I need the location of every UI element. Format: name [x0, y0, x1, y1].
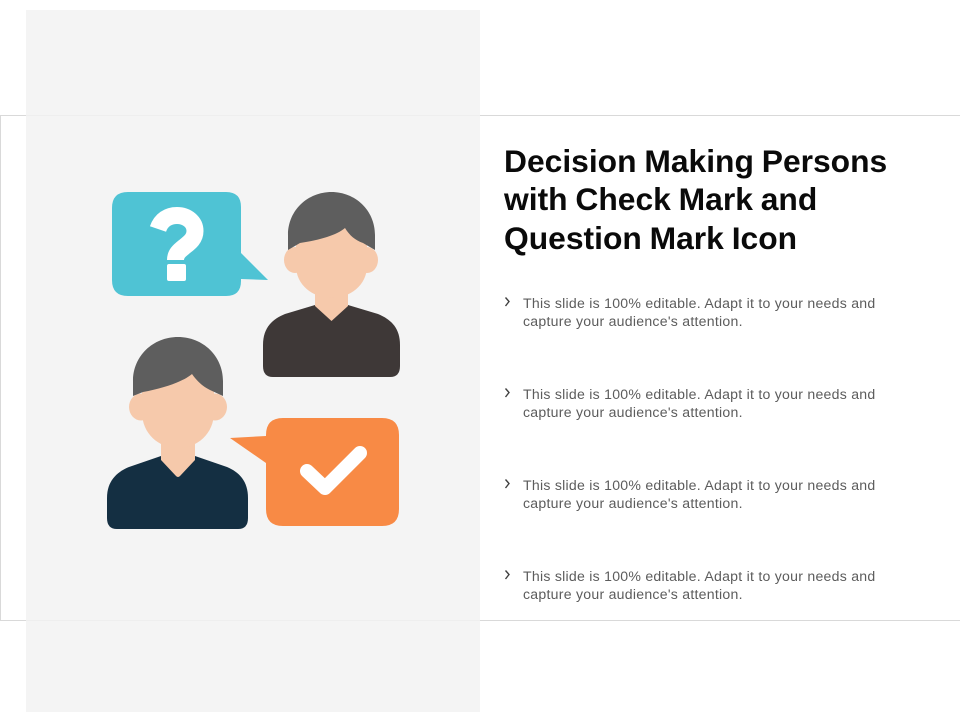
panel: grey illustration background — [26, 10, 480, 712]
title: Decision Making Persons — [504, 143, 887, 179]
title: with Check Mark and — [504, 181, 817, 217]
text block: bullet 2 — [505, 386, 876, 420]
title — [504, 143, 887, 256]
text block: bullet 3: This slide is 100% editable. Adapt it to your needs and — [523, 477, 876, 493]
text block: bullet 1: capture your audience's attention. — [523, 313, 743, 329]
icon: person bottom left — [107, 337, 248, 529]
text block: bullet 4: capture your audience's attention. — [523, 586, 743, 602]
text block: bullet 4: This slide is 100% editable. Adapt it to your needs and — [523, 568, 876, 584]
icon: orange speech bubble with check mark — [230, 418, 399, 526]
frame lines — [0, 115, 960, 621]
text block: bullet 1: This slide is 100% editable. Adapt it to your needs and — [523, 295, 876, 311]
text block: bullet 4 — [505, 568, 876, 602]
title: Question Mark Icon — [504, 220, 797, 256]
text block: bullet 1 — [505, 295, 876, 329]
text block: bullet 3 — [505, 477, 876, 511]
icon: person top right — [263, 192, 400, 377]
icon: blue speech bubble with question mark — [112, 192, 268, 296]
text block: bullet 3: capture your audience's attention. — [523, 495, 743, 511]
text block: bullet 2: capture your audience's attention. — [523, 404, 743, 420]
text block: bullet 2: This slide is 100% editable. Adapt it to your needs and — [523, 386, 876, 402]
